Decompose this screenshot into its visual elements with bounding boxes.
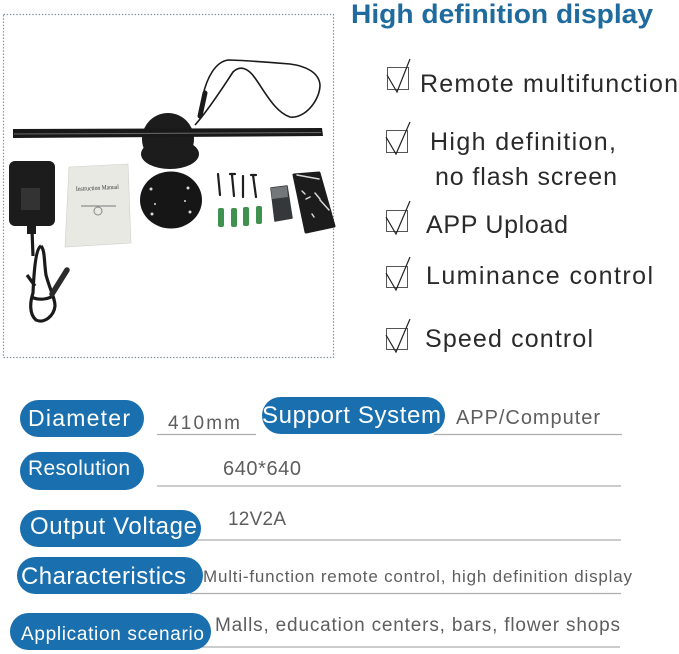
panel: product kit photo [4, 14, 334, 358]
feature: speed control [386, 319, 593, 353]
spec row: resolution: 640*640 [223, 458, 301, 480]
feature: high definition, no flash screen: High definition, [430, 128, 616, 156]
illustration: power adapter [9, 161, 67, 321]
spec table [10, 397, 632, 650]
spec row: characteristics: Multi-function remote control, high definition display [203, 567, 632, 586]
feature: high definition, no flash screen: no flash screen [435, 163, 617, 191]
feature: speed control: Speed control [425, 325, 593, 353]
feature list [386, 59, 678, 353]
feature: remote multifunction: Remote multifunction [420, 70, 678, 98]
spec row: diameter: 410mm [168, 413, 240, 434]
feature: luminance control: Luminance control [426, 262, 653, 290]
feature: high definition, no flash screen [386, 122, 617, 191]
illustration: mounting disc [140, 172, 202, 228]
spec row: support system [262, 397, 622, 434]
illustration: remote control [294, 173, 334, 232]
spec row: characteristics [17, 557, 632, 594]
spec row: resolution [20, 452, 621, 490]
spec row: support system: Support System [262, 402, 441, 429]
spec row: diameter [20, 400, 256, 437]
feature: APP upload: APP Upload [426, 211, 568, 239]
illustration: hologram fan base [141, 113, 199, 169]
illustration: fan blade bar [13, 128, 323, 138]
spec row: diameter: Diameter [28, 405, 130, 431]
spec row: application scenario: Application scenario [21, 624, 204, 645]
spec row: application scenario: Malls, education centers, bars, flower shops [215, 615, 620, 636]
spec row: resolution: Resolution [28, 457, 130, 480]
illustration: green wall anchors [218, 206, 262, 227]
illustration: screws [218, 174, 256, 197]
illustration: instruction manual: Instruction Manual [76, 184, 119, 193]
spec row: characteristics: Characteristics [21, 563, 186, 590]
illustration: USB drive [271, 186, 292, 221]
spec row: support system: APP/Computer [456, 407, 600, 429]
spec row: output voltage [20, 509, 621, 547]
spec row: application scenario [10, 613, 620, 650]
feature: APP upload [386, 201, 568, 239]
illustration: power cord on fan [195, 60, 320, 125]
spec row: output voltage: Output Voltage [30, 513, 197, 540]
spec row: output voltage: 12V2A [228, 509, 286, 530]
illustration: instruction manual [65, 164, 131, 247]
feature: remote multifunction [387, 59, 678, 98]
